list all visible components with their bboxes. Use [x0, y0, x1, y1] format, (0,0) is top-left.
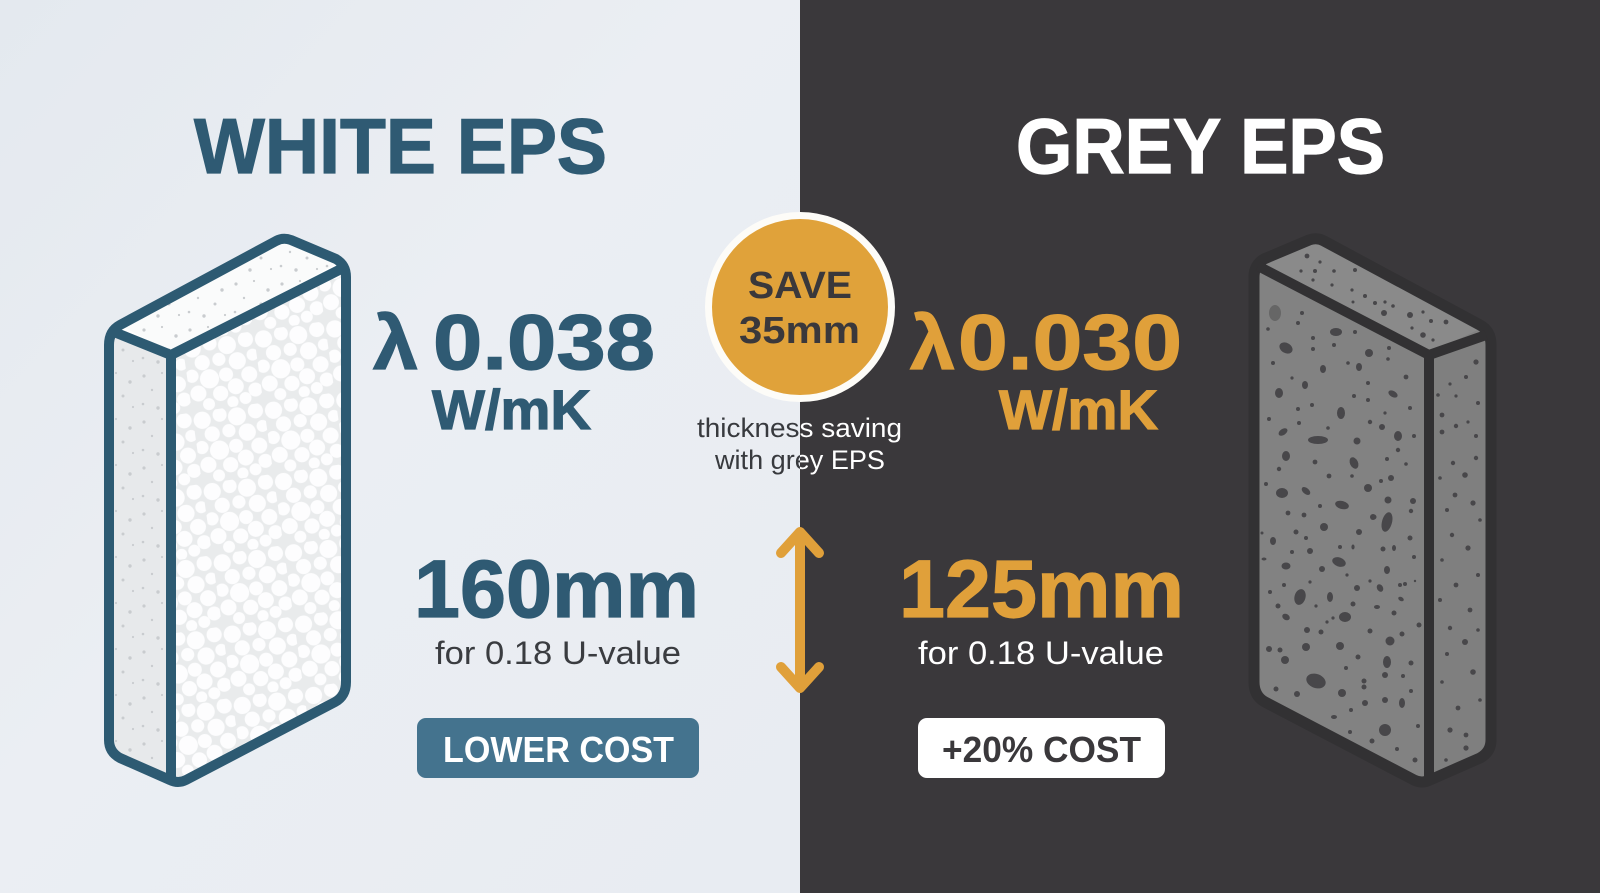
- stat: grey EPS lambda unit: W/mK: [999, 378, 1158, 441]
- stat: white EPS lambda value: λ: [373, 301, 418, 386]
- stat: white EPS lambda value: [373, 298, 655, 386]
- badge: save 35mm: SAVE: [748, 265, 852, 307]
- icon: white EPS board: [109, 239, 346, 782]
- heading: white EPS: WHITE EPS: [194, 102, 607, 190]
- badge: save 35mm: 35mm: [739, 310, 860, 352]
- text: white EPS U-value note: for 0.18 U-value: [435, 635, 681, 671]
- panel: grey EPS background: [800, 0, 1600, 893]
- caption: thickness saving with grey EPS: thickness saving: [697, 413, 902, 443]
- caption: thickness saving with grey EPS: with grey EPS: [714, 445, 885, 475]
- heading: grey EPS: GREY EPS: [1016, 102, 1385, 190]
- badge: save 35mm: [708, 216, 892, 398]
- badge: lower cost: LOWER COST: [443, 729, 674, 770]
- badge: plus 20 percent cost: +20% COST: [942, 729, 1141, 770]
- stat: grey EPS lambda value: λ: [910, 301, 955, 386]
- badge: lower cost: [417, 718, 699, 778]
- stat: white EPS lambda unit: W/mK: [432, 378, 591, 441]
- icon: grey EPS board: [1254, 239, 1491, 782]
- panel: white EPS background: [0, 0, 800, 893]
- stat: grey EPS lambda value: 0.030: [958, 298, 1182, 386]
- arrow: thickness comparison: [781, 532, 819, 688]
- stat: white EPS thickness: 160mm: [414, 544, 699, 635]
- text: grey EPS U-value note: for 0.18 U-value: [918, 635, 1164, 671]
- stat: white EPS lambda value: 0.038: [433, 298, 655, 386]
- stat: grey EPS thickness: 125mm: [899, 544, 1184, 635]
- badge: plus 20 percent cost: [918, 718, 1165, 778]
- caption: thickness saving with grey EPS: [697, 413, 902, 475]
